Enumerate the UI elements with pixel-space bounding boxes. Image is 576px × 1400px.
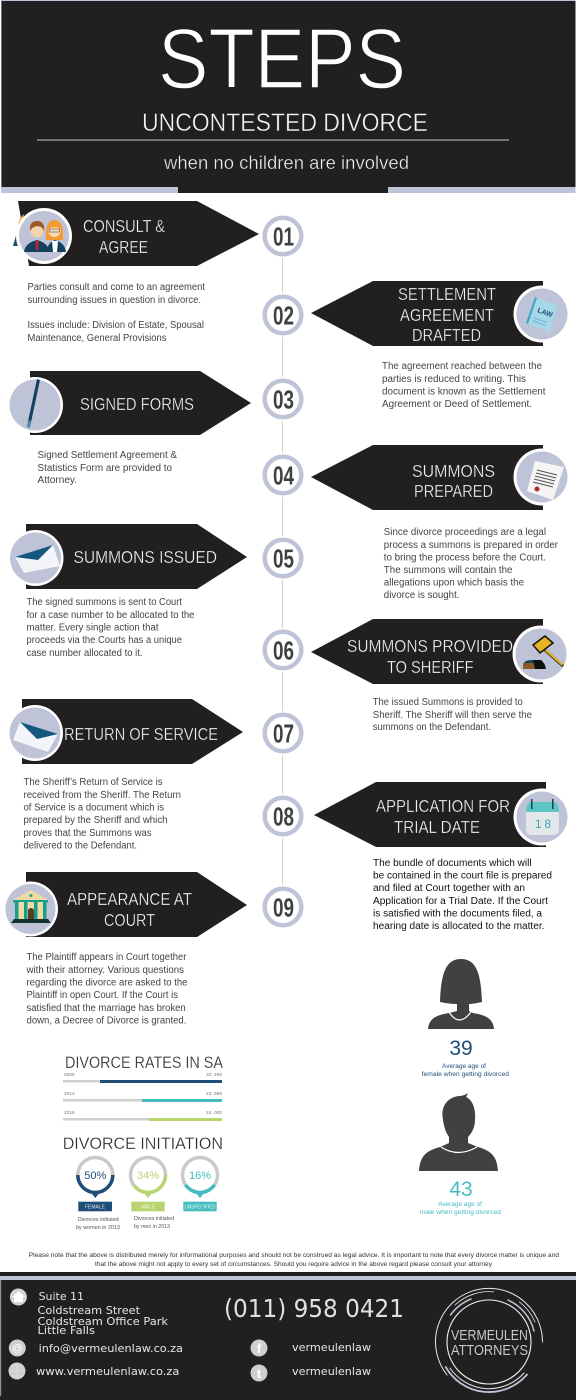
step 1 text: Parties consult and come to an agreement — [28, 282, 205, 293]
step 7 text: The Sheriff’s Return of Service is — [24, 777, 162, 788]
step 4 text: The summons will contain the — [384, 565, 513, 576]
step 6 text: Sheriff. The Sheriff will then serve the — [373, 710, 532, 721]
step 4 text: process a summons is prepared in order — [384, 540, 559, 551]
caption — [422, 1063, 509, 1078]
step number 05 — [261, 536, 305, 580]
female age panel — [422, 959, 509, 1078]
address: Coldstream Street — [38, 1304, 141, 1317]
step 4 banner — [311, 445, 570, 510]
step 8 text: is satisfied with the documents filed, a — [373, 908, 542, 920]
step 9 text — [26, 952, 188, 1026]
icon: two people — [16, 208, 72, 264]
address: Coldstream Office Park — [38, 1315, 169, 1328]
website: www.vermeulenlaw.co.za — [36, 1365, 179, 1378]
bar: 2016: 24, 000 — [206, 1110, 222, 1116]
step 2 text — [382, 361, 546, 410]
gauge: female 50%: 50% — [84, 1170, 107, 1182]
caption: Average age of — [442, 1063, 486, 1070]
twitter: t — [257, 1366, 262, 1381]
heading: COURT — [104, 910, 155, 930]
facebook — [250, 1340, 371, 1356]
gauge: female 50%: by women in 2013 — [76, 1225, 120, 1231]
step number 07 — [261, 711, 305, 755]
step 3 text: Signed Settlement Agreement & — [38, 450, 177, 461]
email — [9, 1340, 183, 1356]
logo — [436, 1288, 543, 1392]
step 9 text: regarding the divorce are asked to the — [26, 978, 188, 988]
icon: envelope — [8, 530, 64, 586]
step 8 text: Application for a Trial Date. If the Court — [373, 896, 548, 907]
gauge: unspecified 16%: UNSPECIFIED — [184, 1204, 216, 1210]
logo: VERMEULEN — [451, 1327, 528, 1344]
heading: APPLICATION FOR — [376, 796, 510, 816]
email: @ — [12, 1343, 23, 1355]
step number 05: 05 — [273, 544, 294, 574]
heading: SUMMONS PROVIDED — [347, 636, 513, 656]
website — [8, 1362, 179, 1380]
icon: document — [514, 448, 570, 506]
step 5 text: for a case number to be allocated to the — [26, 610, 195, 621]
step 4 text: to bring the process before the Court. — [384, 552, 546, 564]
heading: SUMMONS — [412, 461, 495, 481]
heading: RETURN OF SERVICE — [64, 724, 218, 744]
step 6 text: The issued Summons is provided to — [373, 697, 523, 708]
heading — [412, 461, 495, 501]
step number 02 — [261, 293, 305, 337]
step number 07: 07 — [273, 718, 294, 748]
gauge: female 50% — [76, 1158, 120, 1231]
step number 03 — [261, 377, 305, 421]
disclaimer: that the above might not apply to every set of circumstances. Should you require advice in the above regard please consult your attorney — [95, 1261, 493, 1268]
step 5 text — [26, 597, 195, 659]
bar: 2005: 32, 485 — [206, 1072, 222, 1078]
heading: CONSULT & — [83, 216, 165, 236]
step 3 banner — [7, 371, 251, 435]
gauge: male 34%: 34% — [137, 1170, 159, 1182]
step number 02: 02 — [273, 300, 294, 330]
step number 09 — [261, 885, 305, 929]
step 5 text: matter. Every single action that — [26, 622, 159, 634]
facebook: f — [257, 1341, 262, 1356]
footer — [0, 1272, 576, 1400]
step 2 text: parties is reduced to writing. This — [382, 374, 526, 385]
step 8 text: be contained in the court file is prepared — [373, 870, 552, 882]
step number 01: 01 — [273, 222, 294, 252]
step 8 text: hearing date is allocated to the matter. — [373, 921, 544, 932]
email: info@vermeulenlaw.co.za — [39, 1342, 183, 1355]
step 2 text: Agreement or Deed of Settlement. — [382, 399, 532, 410]
heading: APPEARANCE AT — [67, 889, 192, 909]
phone number: (011) 958 0421 — [224, 1294, 404, 1323]
caption: Average age of — [438, 1201, 482, 1208]
disclaimer: Please note that the above is distributed merely for informational purposes and should not be construed as legal advice. It is important to note that every divorce matter is unique and — [29, 1252, 559, 1259]
step 5 banner — [8, 524, 247, 589]
step number 04 — [261, 453, 305, 497]
step 1 banner — [13, 201, 259, 266]
step 1 text: Issues include: Division of Estate, Spousal — [28, 320, 204, 331]
icon: law book — [514, 286, 570, 342]
bar: 2016 — [63, 1110, 222, 1121]
icon: gavel — [512, 626, 570, 682]
bar: 2012: 2012 — [64, 1091, 75, 1097]
divorce initiation chart — [63, 1134, 223, 1231]
step 5 text: The signed summons is sent to Court — [26, 597, 182, 608]
heading — [398, 284, 496, 345]
gauge: female 50%: FEMALE — [85, 1204, 106, 1210]
step number 06 — [261, 628, 305, 672]
heading: AGREE — [99, 237, 148, 257]
step 9 text: Plaintiff in open Court. If the Court is — [26, 990, 178, 1001]
gauge: unspecified 16%: 16% — [189, 1170, 211, 1182]
step 7 text: prepared by the Sheriff and which — [24, 815, 168, 826]
heading: PREPARED — [414, 481, 493, 501]
step 4 text — [384, 527, 559, 601]
caption: female when getting divorced — [422, 1071, 509, 1078]
step 1 text: Maintenance, General Provisions — [28, 333, 166, 344]
heading: DIVORCE RATES IN SA — [65, 1053, 224, 1072]
step 8 banner — [314, 782, 570, 847]
bar: 2012: 23, 998 — [206, 1091, 222, 1097]
gauge: unspecified 16% — [182, 1158, 218, 1211]
step 9 text: satisfied that the marriage has broken — [26, 1003, 186, 1014]
step number 08: 08 — [273, 802, 294, 832]
step 2 banner — [311, 281, 570, 346]
caption — [420, 1201, 501, 1216]
icon: calendar: 18 — [535, 817, 551, 831]
step number 09: 09 — [273, 892, 294, 922]
step 3 text: Statistics Form are provided to — [38, 463, 172, 474]
heading — [83, 216, 165, 257]
icon: envelope — [7, 705, 63, 761]
bar: 2016: 2016 — [64, 1110, 75, 1116]
step 8 text: The bundle of documents which will — [373, 858, 532, 869]
twitter — [250, 1364, 371, 1382]
step 5 text: case number allocated to it. — [26, 648, 142, 659]
step number 04: 04 — [273, 460, 294, 490]
step 3 text — [38, 450, 177, 486]
timeline — [261, 214, 305, 929]
step 7 text: of Service is a document which is — [24, 802, 164, 814]
step 2 text: document is known as the Settlement — [382, 386, 546, 398]
disclaimer — [29, 1252, 559, 1268]
heading: TRIAL DATE — [394, 817, 480, 837]
step 9 banner — [3, 872, 247, 937]
icon: female silhouette — [428, 959, 494, 1029]
tagline: when no children are involved — [163, 152, 409, 173]
address: Suite 11 — [39, 1290, 84, 1303]
step 2 text: The agreement reached between the — [382, 361, 542, 372]
step 9 text: The Plaintiff appears in Court together — [26, 952, 187, 963]
step 4 text: allegations upon which basis the — [384, 578, 524, 588]
step number 06: 06 — [273, 636, 294, 666]
gauge: male 34%: MALE — [141, 1204, 155, 1210]
icon: male silhouette — [419, 1093, 498, 1171]
male age panel — [419, 1093, 501, 1216]
address: Little Falls — [38, 1324, 95, 1337]
step 4 text: divorce is sought. — [384, 590, 460, 601]
heading: DIVORCE INITIATION — [63, 1134, 223, 1153]
step number 03: 03 — [273, 384, 294, 414]
step 4 text: Since divorce proceedings are a legal — [384, 527, 546, 538]
heading: TO SHERIFF — [387, 657, 474, 677]
icon: pen — [7, 377, 63, 433]
icon: home — [10, 1288, 27, 1306]
heading: DRAFTED — [412, 325, 481, 345]
step 3 text: Attorney. — [38, 475, 77, 486]
header banner — [1, 0, 576, 193]
address — [10, 1288, 169, 1337]
bar: 2012 — [63, 1091, 222, 1102]
step 8 text: and filed at Court together with an — [373, 883, 525, 894]
stat: 39: 39 — [449, 1037, 473, 1060]
heading: SUMMONS ISSUED — [74, 547, 217, 567]
step 1 text: surrounding issues in question in divorce. — [28, 295, 201, 306]
icon: courthouse — [3, 882, 58, 936]
step 5 text: proceeds via the Courts has a unique — [26, 635, 182, 646]
heading — [67, 889, 192, 930]
heading — [347, 636, 513, 677]
step number 01 — [261, 214, 305, 258]
bar: 2005: 2005 — [64, 1072, 75, 1078]
stat: 43: 43 — [449, 1178, 473, 1201]
step 7 banner — [7, 699, 243, 764]
heading: SETTLEMENT — [398, 284, 496, 304]
divorce rates chart — [63, 1053, 224, 1121]
icon: law book: LAW — [536, 307, 554, 319]
gauge: female 50%: Divorces initiated — [78, 1217, 119, 1223]
step number 08 — [261, 794, 305, 838]
twitter: vermeulenlaw — [292, 1365, 371, 1378]
step 9 text: with their attorney. Various questions — [26, 965, 184, 976]
step 8 text — [373, 858, 552, 932]
logo: ATTORNEYS — [451, 1342, 528, 1359]
gauge: male 34% — [130, 1158, 174, 1230]
subtitle: UNCONTESTED DIVORCE — [142, 109, 428, 137]
heading — [376, 796, 510, 837]
gauge: male 34%: by men in 2013 — [134, 1224, 170, 1230]
step 7 text: received from the Sheriff. The Return — [24, 790, 181, 801]
heading: SIGNED FORMS — [80, 394, 194, 414]
step 6 text — [373, 697, 532, 733]
title: STEPS — [158, 12, 406, 107]
facebook: vermeulenlaw — [292, 1341, 371, 1354]
step 9 text: down, a Decree of Divorce is granted. — [26, 1016, 186, 1026]
caption: male when getting divorced — [420, 1209, 501, 1216]
heading: AGREEMENT — [400, 305, 494, 325]
step 7 text — [24, 777, 181, 852]
step 1 text — [28, 282, 205, 344]
step 7 text: proves that the Summons was — [24, 828, 152, 839]
step 6 text: summons on the Defendant. — [373, 722, 491, 733]
step 6 banner — [311, 619, 570, 684]
gauge: male 34%: Divorces initiated — [134, 1216, 174, 1222]
icon: calendar — [514, 788, 570, 846]
bar: 2005 — [63, 1072, 222, 1083]
step 7 text: delivered to the Defendant. — [24, 840, 137, 852]
